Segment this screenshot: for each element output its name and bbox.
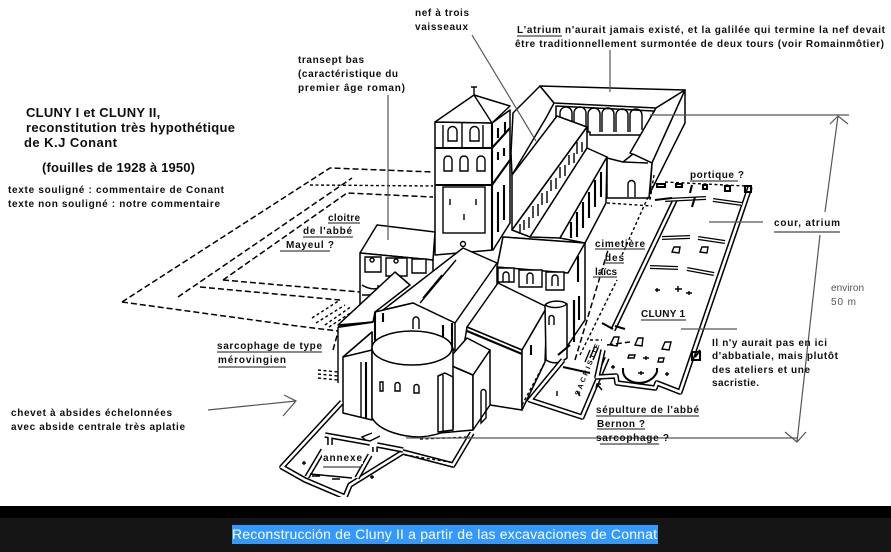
label: Cluny 1: CLUNY 1 (641, 309, 685, 320)
leader lines (388, 35, 849, 438)
label: sarcophage merovingien: mérovingien (218, 355, 286, 366)
label: transept bas: (caractéristique du (298, 69, 398, 80)
label: sarcophage merovingien (217, 341, 322, 367)
label: atrium: être traditionnellement surmontée de deux tours (voir Romainmôtier) (515, 39, 884, 50)
label: chevet: chevet à absides échelonnées (11, 408, 172, 419)
label: chevet: avec abside centrale très aplatie (11, 422, 185, 433)
label: nef a trois vaisseaux (415, 8, 469, 33)
label: nef a trois vaisseaux: vaisseaux (415, 22, 468, 33)
right chapel and pilaster (440, 338, 490, 433)
label: atrium (515, 25, 886, 50)
label: cloitre: Mayeul ? (286, 240, 334, 251)
sacristy foundation (530, 343, 607, 417)
comment text: abbatiale: sacristie. (712, 378, 759, 389)
label: sepulture (596, 405, 699, 444)
choir roof and gable (375, 242, 497, 350)
caption text: Reconstrucción de Cluny II a partir de las excavaciones de Connat (232, 526, 657, 542)
small arrow to sepulture (596, 384, 602, 390)
nave roofs and clerestory (512, 116, 607, 243)
arrow to chevet (208, 395, 296, 416)
label: cloitre: de l'abbé (303, 226, 352, 237)
label: annexe: annexe (323, 453, 362, 464)
label: cimetiere des laics (593, 239, 645, 278)
Cluny I plan (575, 182, 751, 392)
bell tower (435, 87, 510, 255)
main title (24, 105, 235, 175)
main title: (fouilles de 1928 à 1950) (42, 160, 195, 175)
label: portique: portique ? (690, 170, 744, 181)
label: transept bas (298, 55, 405, 94)
comment text: abbatiale: d'abbatiale, mais plutôt (712, 351, 839, 362)
apse drum (362, 331, 453, 442)
label: chevet (11, 408, 185, 433)
label: transept bas: transept bas (298, 55, 364, 66)
comment text: abbatiale: des ateliers et une (712, 365, 810, 376)
caption bar (0, 506, 891, 552)
dimension arrow 50 m (785, 116, 848, 442)
label: cour atrium: cour, atrium (774, 218, 840, 229)
main title: reconstitution très hypothétique (26, 120, 235, 135)
main title: de K.J Conant (24, 135, 118, 150)
comment text: abbatiale (712, 338, 839, 389)
label: cloitre (280, 213, 360, 251)
left wing roof (338, 272, 410, 383)
label: environ 50 m: 50 m (831, 297, 856, 308)
main title: CLUNY I et CLUNY II, (26, 105, 160, 120)
label: environ 50 m (831, 283, 864, 308)
comment text: abbatiale: Il n'y aurait pas en ici (712, 338, 827, 349)
dashed cloister foundations (122, 168, 433, 380)
label: annexe (322, 451, 363, 467)
legend text: texte non souligné : notre commentaire (8, 199, 220, 210)
label: cimetiere des laics: cimetière (595, 239, 645, 250)
foundation plan under apse (282, 402, 472, 497)
label: sepulture: sarcophage ? (596, 433, 669, 444)
legend text (8, 185, 225, 210)
right transept arm (497, 237, 585, 345)
left chapel (343, 332, 372, 420)
label: environ 50 m: environ (831, 283, 864, 294)
label: transept bas: premier âge roman) (298, 83, 405, 94)
label: sepulture: sépulture de l'abbé (596, 405, 699, 416)
sacristy wall lettering: SACRISTIE (574, 343, 602, 397)
label: cimetiere des laics: laïcs (595, 267, 617, 278)
label: atrium: L'atrium n'aurait jamais existé, et la galilée qui termine la nef devait (517, 25, 886, 36)
legend text: texte souligné : commentaire de Conant (8, 185, 225, 196)
label: cimetiere des laics: des (605, 253, 624, 264)
label: sarcophage merovingien: sarcophage de type (217, 341, 322, 352)
label: cloitre: cloitre (328, 213, 360, 224)
atrium building (511, 86, 685, 206)
label: nef a trois vaisseaux: nef à trois (415, 8, 469, 19)
label: sepulture: Bernon ? (597, 419, 645, 430)
left transept arm (360, 225, 435, 320)
big right chapel (455, 283, 574, 410)
